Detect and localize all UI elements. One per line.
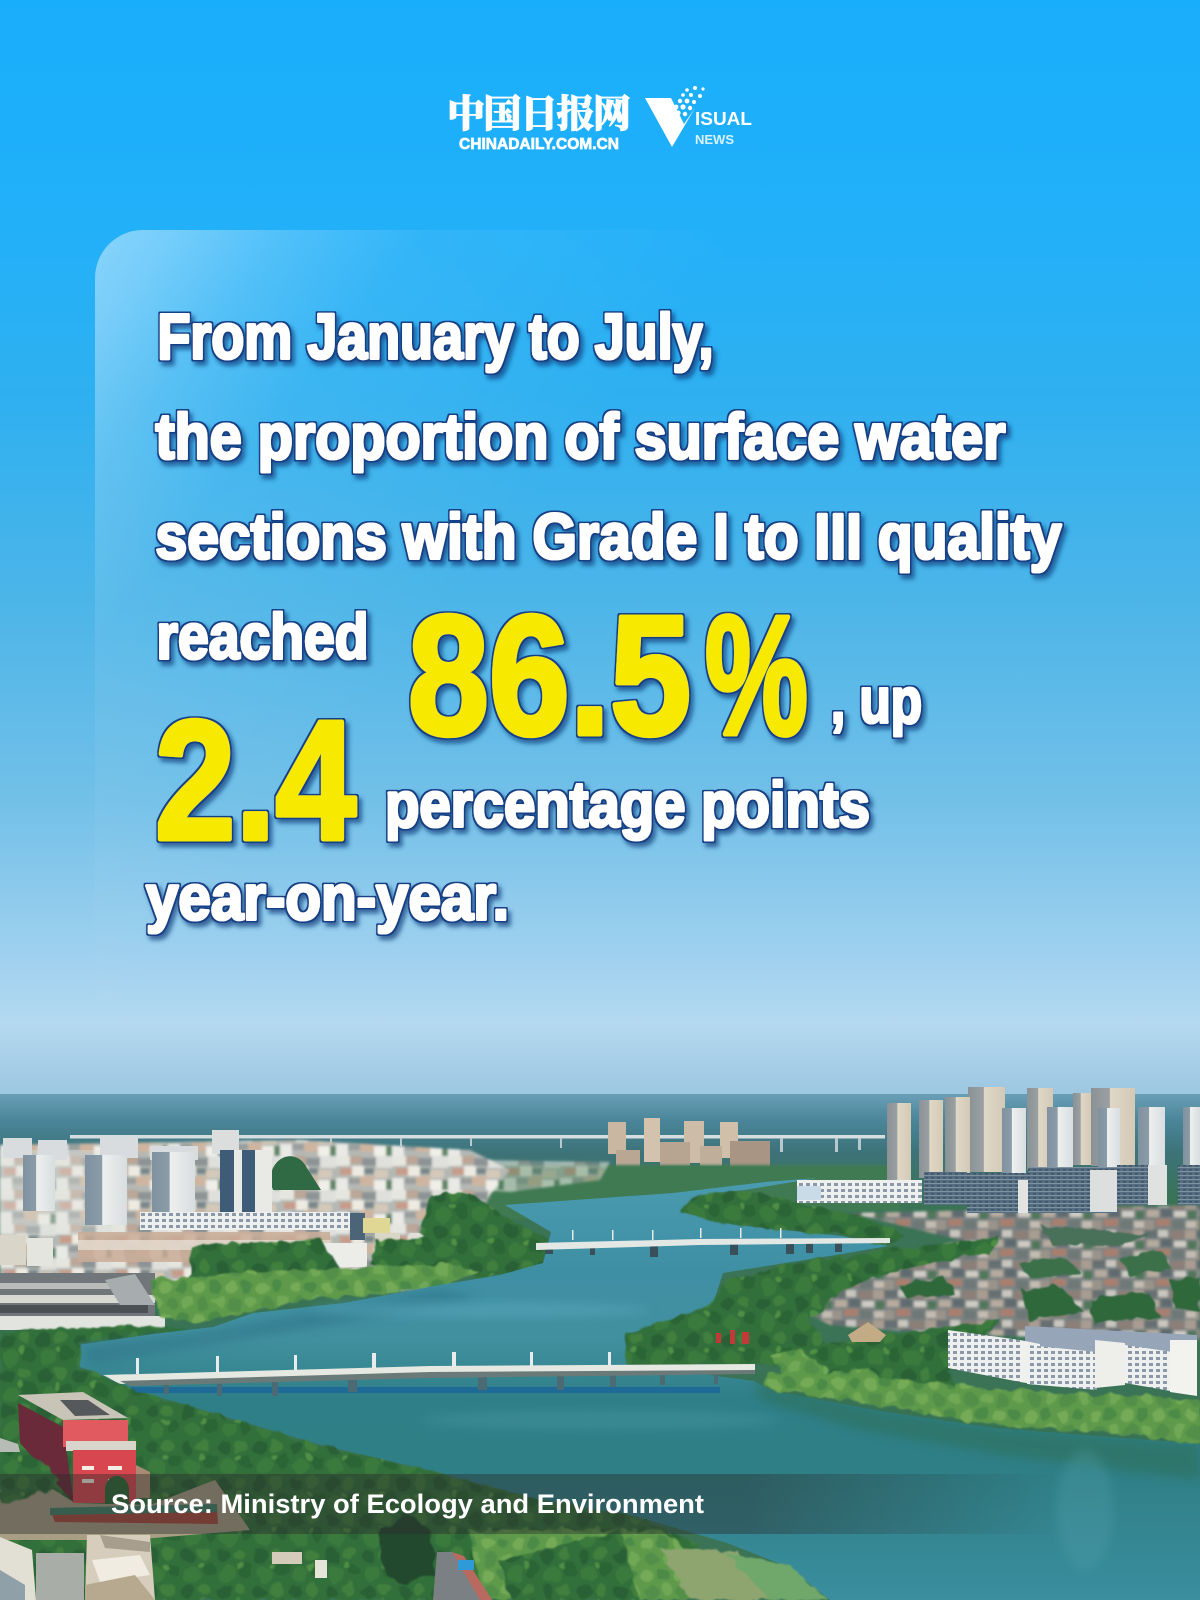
headline line 4: up: , up [831, 664, 922, 736]
logo: China Daily masthead: 中国日报网 [447, 83, 631, 138]
photo: near bridge [103, 1352, 755, 1396]
photo: midground houses near river bend [480, 1160, 610, 1192]
source bar [0, 1474, 1060, 1534]
photo: upper right riverbank island [681, 1190, 905, 1246]
photo: far tower cluster [608, 1118, 770, 1168]
photo: lower right shore trees [766, 1345, 1200, 1444]
statistic: 86.5%: 86.5 [408, 581, 691, 771]
photo: water reflections [80, 1288, 1200, 1570]
panel: translucent rounded card [95, 230, 1200, 1000]
photo: foreground ground and roads [0, 1438, 250, 1540]
photo: white apartment blocks [948, 1326, 1197, 1396]
photo: foreground dark tree and bushes [165, 1515, 828, 1600]
photo: red building [18, 1392, 150, 1504]
photo: right residential towers [887, 1087, 1200, 1181]
photo: road and sign [272, 1552, 492, 1600]
headline line 5: percentage points: percentage points [385, 768, 870, 840]
photo: far viaduct [70, 1135, 885, 1152]
photo: lower left tree bank [0, 1330, 700, 1600]
photo: small trees left of red building [0, 1455, 60, 1505]
photo: left trees and bank [0, 1195, 552, 1345]
photo: midground greenery [480, 1165, 900, 1220]
source bar: Source: Ministry of Ecology and Environment [111, 1489, 704, 1519]
icon: Visual News V mark: ISUAL [695, 109, 752, 129]
headline line 4: reached: reached [156, 600, 368, 672]
headline line 2: the proportion of surface water [156, 400, 1006, 472]
logo: China Daily and Visual News [447, 83, 752, 153]
photo: foreground houses [0, 1535, 155, 1600]
photo: left low-rise complex [0, 1273, 165, 1330]
photo: upper bridge [536, 1228, 890, 1257]
icon: Visual News V mark [645, 86, 752, 147]
headline line 3: sections with Grade I to III quality [156, 500, 1062, 572]
logo: China Daily masthead: CHINADAILY.COM.CN [459, 136, 619, 153]
headline: main statement text [146, 300, 1062, 934]
photo: right city houses [760, 1205, 1200, 1340]
statistic: 86.5%: % [705, 581, 808, 771]
photo: right bank trees [625, 1225, 1200, 1385]
photo: tan gable houses and red decorations [716, 1322, 886, 1344]
photo: right mid-rise row [797, 1165, 1200, 1213]
statistic: 2.4: 2.4 [155, 686, 356, 876]
headline line 1: From January to July, [158, 300, 714, 372]
photo: distant forest [0, 1094, 1200, 1600]
photo: river [77, 1178, 1200, 1600]
photo: left city blocks [0, 1130, 510, 1300]
photo: aerial view of river and city [0, 1087, 1200, 1600]
headline line 6: year-on-year: year-on-year. [146, 862, 509, 934]
icon: Visual News V mark: NEWS [695, 132, 734, 147]
